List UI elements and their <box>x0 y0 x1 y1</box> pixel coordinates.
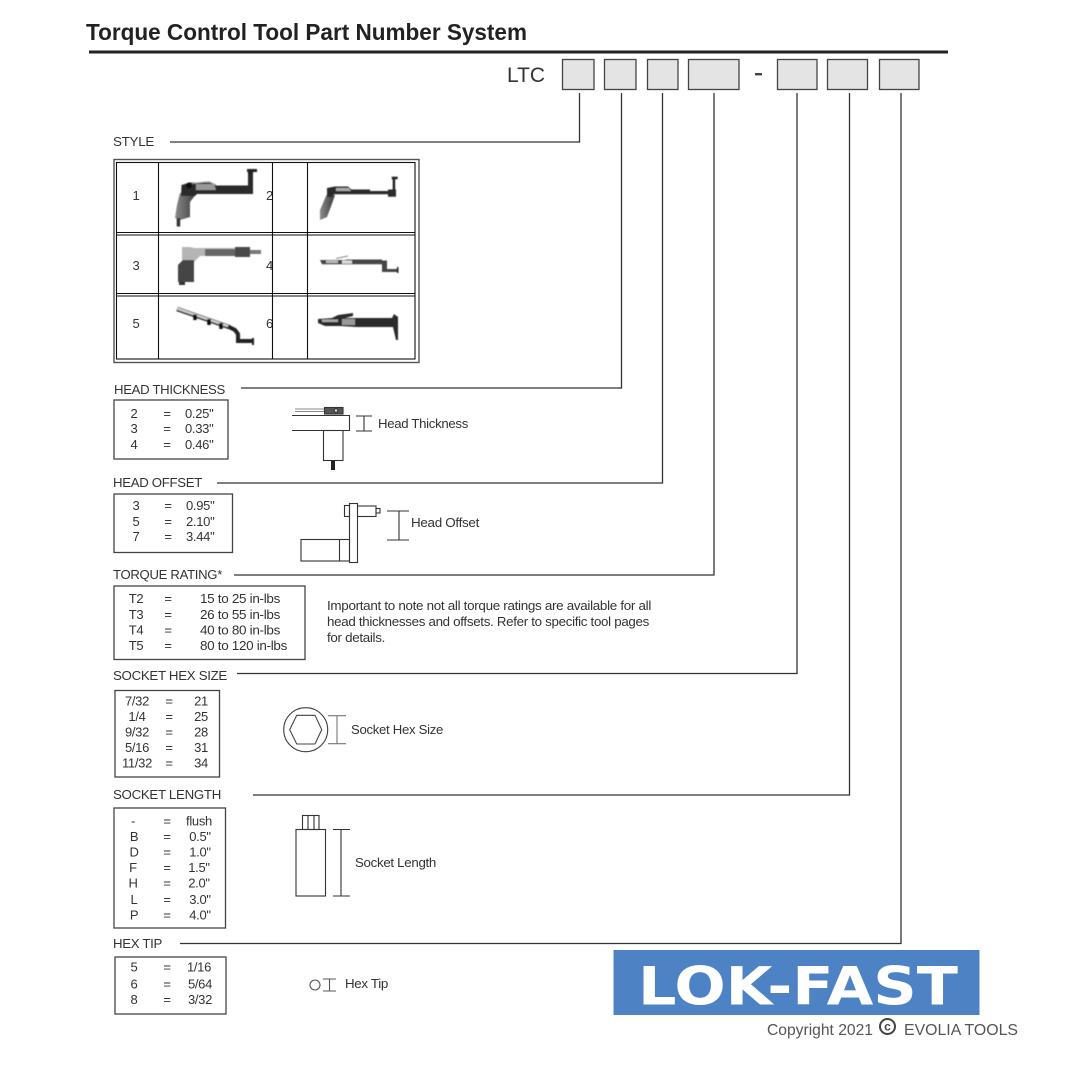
panel: style table: 5 <box>133 316 140 331</box>
panel: head thickness values: = <box>163 421 171 436</box>
title: Torque Control Tool Part Number System <box>86 19 527 45</box>
label: socket hex size: Socket Hex Size <box>351 722 443 737</box>
panel: head offset values <box>114 494 232 552</box>
panel: hex tip values: 5 <box>131 960 138 974</box>
panel: head offset values: = <box>164 498 172 513</box>
icon: tool style 5 <box>177 308 254 345</box>
panel: socket hex size values: 1/4 <box>128 709 146 724</box>
panel: socket hex size values: 31 <box>194 740 208 755</box>
label: head thickness: Head Thickness <box>378 416 469 431</box>
part number code boxes: LTC <box>507 64 545 87</box>
panel: head thickness values: = <box>163 406 171 421</box>
logo: LOK-FAST: LOK-FAST <box>638 956 958 1018</box>
icon: socket hex diagram <box>284 708 346 752</box>
heading: torque rating: TORQUE RATING* <box>113 567 222 582</box>
panel: socket length values: P <box>130 908 138 922</box>
panel: torque rating values: 26 to 55 in-lbs <box>200 607 281 622</box>
panel: torque rating values: T4 <box>129 622 143 638</box>
panel: head offset values: 7 <box>133 529 140 544</box>
panel: style table: 2 <box>266 188 273 203</box>
panel: head thickness values <box>114 400 228 459</box>
panel: socket length values: 1.5" <box>188 860 210 875</box>
panel: socket length values: = <box>163 860 171 875</box>
panel: head thickness values: = <box>163 437 171 452</box>
panel: socket hex size values: 11/32 <box>122 756 152 770</box>
panel: hex tip values: = <box>163 960 171 974</box>
panel: head thickness values: 0.33" <box>185 421 214 436</box>
heading: hex tip: HEX TIP <box>113 936 162 951</box>
panel: torque rating values: = <box>164 591 172 606</box>
panel: head thickness values: 2 <box>131 406 138 421</box>
panel: head thickness values: 0.46" <box>185 437 214 452</box>
panel: hex tip values: 8 <box>131 992 138 1007</box>
panel: torque rating values: T3 <box>129 607 143 622</box>
panel: socket hex size values: 7/32 <box>125 694 149 708</box>
label: head offset: Head Offset <box>411 515 480 530</box>
copyright: EVOLIA TOOLS <box>904 1022 1018 1039</box>
icon: tool style 4 <box>320 256 398 273</box>
panel: socket hex size values <box>115 690 220 777</box>
part number code boxes <box>507 60 919 90</box>
icon: head offset diagram <box>301 504 409 562</box>
panel: socket length values: = <box>163 892 171 907</box>
panel: torque rating values <box>114 586 305 660</box>
panel: socket length values: - <box>131 814 135 828</box>
panel: torque rating values: = <box>164 622 172 638</box>
panel: head offset values: 3.44" <box>186 529 215 544</box>
icon: socket length diagram <box>296 816 350 896</box>
icon: tool style 6 <box>318 313 398 340</box>
panel: style table: 1 <box>133 188 140 203</box>
heading: socket hex size: SOCKET HEX SIZE <box>113 668 228 683</box>
icon: tool style 1 <box>175 169 257 226</box>
panel: head offset values: = <box>164 514 172 529</box>
panel: hex tip values: 6 <box>131 976 138 992</box>
panel: socket hex size values: 25 <box>194 709 208 724</box>
panel: torque rating values: 40 to 80 in-lbs <box>200 622 281 638</box>
copyright: c <box>884 1020 891 1034</box>
panel: socket length values: 2.0" <box>188 876 210 890</box>
panel: socket hex size values: = <box>165 694 173 708</box>
panel: socket length values: D <box>129 844 139 860</box>
heading: head offset: HEAD OFFSET <box>113 475 202 490</box>
logo: LOK-FAST <box>614 950 980 1018</box>
panel: head offset values: 5 <box>133 514 140 529</box>
panel: style table: 6 <box>266 316 273 331</box>
panel: hex tip values: = <box>163 992 171 1007</box>
panel: socket hex size values: = <box>165 724 173 740</box>
panel: socket hex size values: = <box>165 756 173 770</box>
heading: socket length: SOCKET LENGTH <box>113 787 221 802</box>
panel: socket length values: 0.5" <box>189 829 211 844</box>
heading: head thickness: HEAD THICKNESS <box>114 382 226 397</box>
panel: socket hex size values: 21 <box>194 694 208 708</box>
panel: torque rating values: 80 to 120 in-lbs <box>200 638 288 653</box>
note: torque availability: Important to note not all torque ratings are available for all <box>327 598 651 613</box>
panel: hex tip values: 3/32 <box>188 992 212 1007</box>
panel: socket length values: = <box>163 908 171 922</box>
panel: torque rating values: T5 <box>129 638 143 653</box>
panel: style table <box>114 160 419 362</box>
note: torque availability <box>327 598 651 645</box>
panel: head thickness values: 3 <box>131 421 138 436</box>
panel: style table: 3 <box>133 258 140 273</box>
panel: socket hex size values: 9/32 <box>125 724 149 740</box>
panel: head thickness values: 4 <box>131 437 138 452</box>
panel: socket length values: 3.0" <box>189 892 211 907</box>
panel: hex tip values: = <box>163 976 171 992</box>
panel: socket length values: 4.0" <box>189 908 211 922</box>
panel: torque rating values: T2 <box>129 591 143 606</box>
panel: socket length values: 1.0" <box>189 844 211 860</box>
connector lines <box>170 93 901 944</box>
panel: socket hex size values: 34 <box>194 756 208 770</box>
panel: hex tip values: 5/64 <box>188 976 212 992</box>
panel: torque rating values: 15 to 25 in-lbs <box>200 591 281 606</box>
panel: hex tip values: 1/16 <box>187 960 211 974</box>
panel: socket hex size values: 5/16 <box>125 740 149 755</box>
copyright: Copyright 2021 <box>767 1022 873 1039</box>
panel: style table: 4 <box>266 258 273 273</box>
panel: socket length values: = <box>163 876 171 890</box>
panel: torque rating values: = <box>164 638 172 653</box>
panel: socket length values: flush <box>186 814 212 828</box>
icon: tool style 3 <box>178 247 261 285</box>
panel: socket hex size values: = <box>165 740 173 755</box>
icon: tool style 2 <box>320 177 398 220</box>
panel: socket length values: L <box>131 892 138 907</box>
panel: head offset values: 0.95" <box>186 498 215 513</box>
icon: head thickness diagram <box>292 408 372 470</box>
panel: socket length values <box>114 808 226 928</box>
panel: head offset values: 2.10" <box>186 514 215 529</box>
panel: socket length values: F <box>129 860 137 875</box>
heading: style: STYLE <box>113 134 155 149</box>
panel: head thickness values: 0.25" <box>185 406 214 421</box>
icon: hex tip diagram <box>310 979 336 991</box>
panel: socket hex size values: = <box>165 709 173 724</box>
panel: head offset values: = <box>164 529 172 544</box>
panel: socket hex size values: 28 <box>194 724 208 740</box>
panel: hex tip values <box>115 957 226 1014</box>
panel: socket length values: = <box>163 814 171 828</box>
note: torque availability: head thicknesses and offsets. Refer to specific tool pages <box>327 614 650 629</box>
panel: socket length values: H <box>128 876 138 890</box>
panel: socket length values: = <box>163 829 171 844</box>
panel: torque rating values: = <box>164 607 172 622</box>
label: socket length: Socket Length <box>355 855 436 870</box>
panel: socket length values: B <box>130 829 138 844</box>
panel: socket length values: = <box>163 844 171 860</box>
copyright <box>767 1019 1018 1039</box>
note: torque availability: for details. <box>327 630 385 645</box>
label: hex tip: Hex Tip <box>345 976 388 991</box>
panel: head offset values: 3 <box>133 498 140 513</box>
